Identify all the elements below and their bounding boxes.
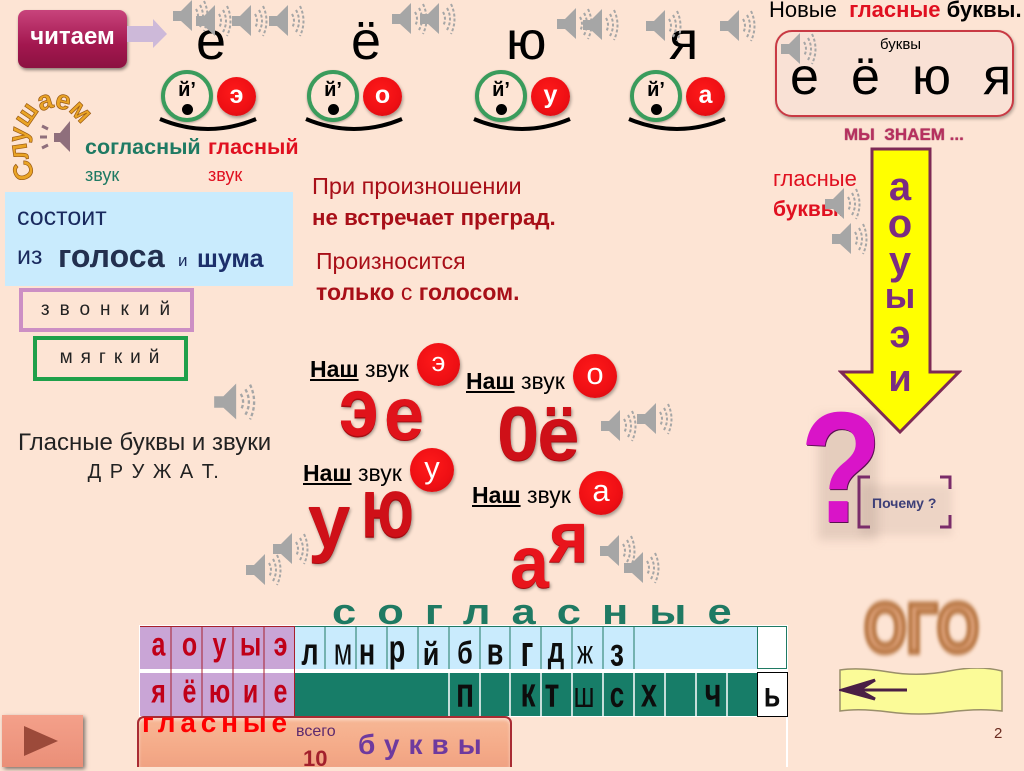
arrow: а о у ы э и: э [890, 314, 910, 356]
table: alphabet grid: ю [209, 673, 230, 711]
panel: состоит из голоса и шума [5, 192, 293, 286]
row 2 vowels [140, 673, 295, 716]
arrow: а о у ы э и: а [889, 165, 911, 209]
icon: speaker [173, 0, 208, 32]
syllable scheme: я [628, 70, 728, 131]
icon: speaker [781, 33, 816, 64]
table: alphabet grid: ё [183, 673, 196, 711]
syllable scheme: ё: о [375, 81, 390, 109]
panel: состоит из голоса и шума: шума [197, 245, 263, 273]
icon: speaker [232, 5, 268, 36]
table: alphabet grid: е [274, 673, 287, 711]
group: Наш звук э: э [432, 347, 445, 377]
table: alphabet grid: в [487, 631, 503, 673]
table: alphabet grid: н [359, 631, 375, 673]
table: alphabet grid: д [548, 628, 564, 670]
icon: question mark with Почему [800, 380, 952, 556]
table: alphabet grid: ы [240, 626, 261, 664]
box: мягкий: мягкий [60, 347, 167, 368]
syllable scheme: ю [473, 70, 573, 131]
table: alphabet grid: я [151, 673, 166, 711]
table: alphabet grid: ь [764, 676, 780, 715]
group: Наш звук о: 0ё [497, 392, 578, 477]
icon: speaker [214, 384, 256, 420]
panel: буквы е ё ю я: я [983, 48, 1011, 106]
group: Наш звук а: я [549, 497, 589, 577]
label: мы знаем: МЫ ЗНАЕМ ... [844, 125, 964, 144]
icon: speaker [196, 5, 232, 36]
panel: буквы е ё ю я: ю [912, 48, 951, 106]
row 1 vowels [140, 626, 295, 669]
label: гласный звук [208, 135, 299, 185]
text: При произношении [312, 173, 556, 230]
top letters row: я [669, 11, 698, 71]
table: alphabet grid [139, 625, 788, 717]
group: Наш звук у: у [424, 450, 440, 485]
panel: гласные всего 10 буквы: гласные [142, 707, 292, 738]
table: alphabet grid: б [457, 636, 473, 671]
group: Наш звук о: о [586, 356, 604, 391]
label: согласный звук [85, 135, 201, 185]
icon: speaker [623, 549, 661, 587]
text: Произносится: только с голосом. [316, 279, 519, 305]
label: согласный звук: согласный [85, 135, 201, 159]
panel: буквы е ё ю я [775, 30, 1014, 117]
panel: гласные всего 10 буквы [137, 716, 512, 767]
box: мягкий [33, 336, 188, 381]
icon: speaker [273, 533, 308, 564]
table: alphabet grid: а [152, 626, 165, 664]
icon: speaker [420, 3, 456, 34]
button: back arrow [839, 668, 1003, 715]
group: Наш звук о [466, 354, 620, 477]
syllable scheme: ё [305, 70, 405, 131]
arrow: а о у ы э и: у [889, 239, 911, 283]
group: Наш звук а [472, 471, 626, 603]
heading: согласные over table: согласные [332, 593, 753, 632]
table: alphabet grid: с [610, 673, 624, 715]
syllable scheme: ё: й’ [324, 79, 342, 101]
icon: speaker [601, 410, 636, 442]
text: Произносится: Произносится [316, 248, 466, 274]
table: alphabet grid: ч [705, 671, 721, 716]
group: Наш звук у: у [308, 479, 350, 564]
icon: speaker [637, 403, 672, 434]
top letters row: ю [506, 11, 546, 71]
icon: speaker [246, 554, 282, 586]
group: Наш звук э: э [339, 362, 379, 454]
word art: ОГО: ОГО [864, 589, 979, 667]
table: alphabet grid: к [520, 670, 536, 716]
panel: буквы е ё ю я: буквы [880, 36, 921, 53]
group: Наш звук э [310, 343, 463, 456]
button: читаем: читаем [30, 23, 115, 50]
label: гласный звук: звук [208, 165, 242, 185]
text: Гласные буквы и звуки дружат: Гласные буквы и звуки [18, 429, 271, 456]
row 2 consonants [295, 673, 757, 716]
table: alphabet grid: м [334, 631, 352, 673]
label: гласный звук: гласный [208, 135, 299, 159]
table: alphabet grid: г [521, 627, 533, 676]
text: Гласные буквы и звуки дружат: Д Р У Ж А Т. [88, 461, 220, 483]
syllable scheme: е: й’ [178, 79, 196, 101]
row 1 consonants [295, 626, 757, 669]
table: alphabet grid: п [456, 670, 474, 716]
icon: question mark with Почему: ? [800, 380, 882, 556]
panel: состоит из голоса и шума: состоит [17, 203, 107, 231]
button: читаем [18, 10, 127, 68]
syllable scheme: е [159, 70, 259, 131]
syllable scheme: ю: й’ [492, 79, 510, 101]
table: alphabet grid: х [641, 671, 657, 716]
panel: буквы е ё ю я: е [790, 48, 819, 106]
top letters row: ё [351, 11, 381, 71]
icon: speaker [646, 10, 682, 42]
label: гласные буквы [773, 166, 857, 221]
icon: speaker [832, 223, 868, 254]
table: alphabet grid: ш [574, 673, 594, 715]
panel: состоит из голоса и шума: и [178, 251, 188, 270]
syllable scheme: е: э [230, 81, 243, 109]
label: согласный звук: звук [85, 165, 119, 185]
group: Наш звук у: Наш звук [303, 460, 402, 486]
table: alphabet grid: у [213, 626, 226, 664]
icon: speaker [825, 188, 860, 220]
top letters row [196, 11, 698, 71]
table: alphabet grid: з [610, 631, 624, 674]
arrow: а о у ы э и: и [888, 358, 912, 400]
icon: question mark with Почему: Почему ? [872, 495, 936, 511]
text: При произношении: не встречает преград. [312, 205, 556, 230]
panel: буквы е ё ю я: ё [851, 48, 880, 106]
table: alphabet grid: ж [577, 634, 593, 672]
arrow: а о у ы э и [838, 148, 962, 434]
page number: 2 [994, 725, 1002, 742]
group: Наш звук о: Наш звук [466, 368, 565, 394]
icon: speaker [557, 8, 592, 40]
table: alphabet grid: т [545, 670, 559, 716]
syllable scheme: я: а [699, 81, 712, 109]
box: звонкий: звонкий [41, 299, 180, 320]
top letters row: е [196, 11, 226, 71]
group: Наш звук а: Наш звук [472, 482, 571, 508]
group: Наш звук у [303, 448, 457, 567]
panel: состоит из голоса и шума: голоса [58, 238, 165, 274]
table: alphabet grid: и [243, 673, 258, 711]
text: Гласные буквы и звуки дружат [18, 429, 271, 483]
group: Наш звук э: Наш звук [310, 356, 409, 382]
panel: гласные всего 10 буквы: 10 [303, 746, 327, 771]
panel: состоит из голоса и шума: из [17, 242, 42, 270]
panel: гласные всего 10 буквы: буквы [358, 729, 491, 760]
table: alphabet grid: й [423, 636, 439, 672]
group: Наш звук э: е [384, 372, 424, 456]
icon: speaker [392, 3, 428, 34]
syllable scheme: ю: у [544, 81, 557, 109]
icon: speaker [583, 9, 618, 40]
arrow: а о у ы э и: ы [885, 275, 915, 316]
text: Произносится [316, 248, 519, 305]
group: Наш звук а: а [592, 473, 610, 508]
group: Наш звук у: ю [361, 462, 414, 555]
box: звонкий [19, 288, 194, 332]
table: alphabet grid: л [301, 631, 319, 673]
text: При произношении: При произношении [312, 173, 522, 199]
arrow: а о у ы э и: о [888, 202, 912, 246]
icon: speaker [720, 10, 756, 42]
group: Наш звук а: а [510, 521, 549, 603]
table: alphabet grid: э [274, 626, 287, 664]
divider: white line under table [786, 717, 788, 767]
table: alphabet grid: р [389, 628, 405, 670]
table: alphabet grid: о [182, 626, 197, 664]
label: гласные буквы: гласные [773, 166, 857, 191]
syllable scheme: я: й’ [647, 79, 665, 101]
icon: speaker [269, 5, 304, 36]
arrow: to letters [127, 19, 167, 48]
button: play [2, 715, 83, 767]
icon: speaker [600, 535, 636, 566]
label: гласные буквы: буквы. [773, 198, 845, 221]
panel: гласные всего 10 буквы: всего [296, 723, 336, 740]
